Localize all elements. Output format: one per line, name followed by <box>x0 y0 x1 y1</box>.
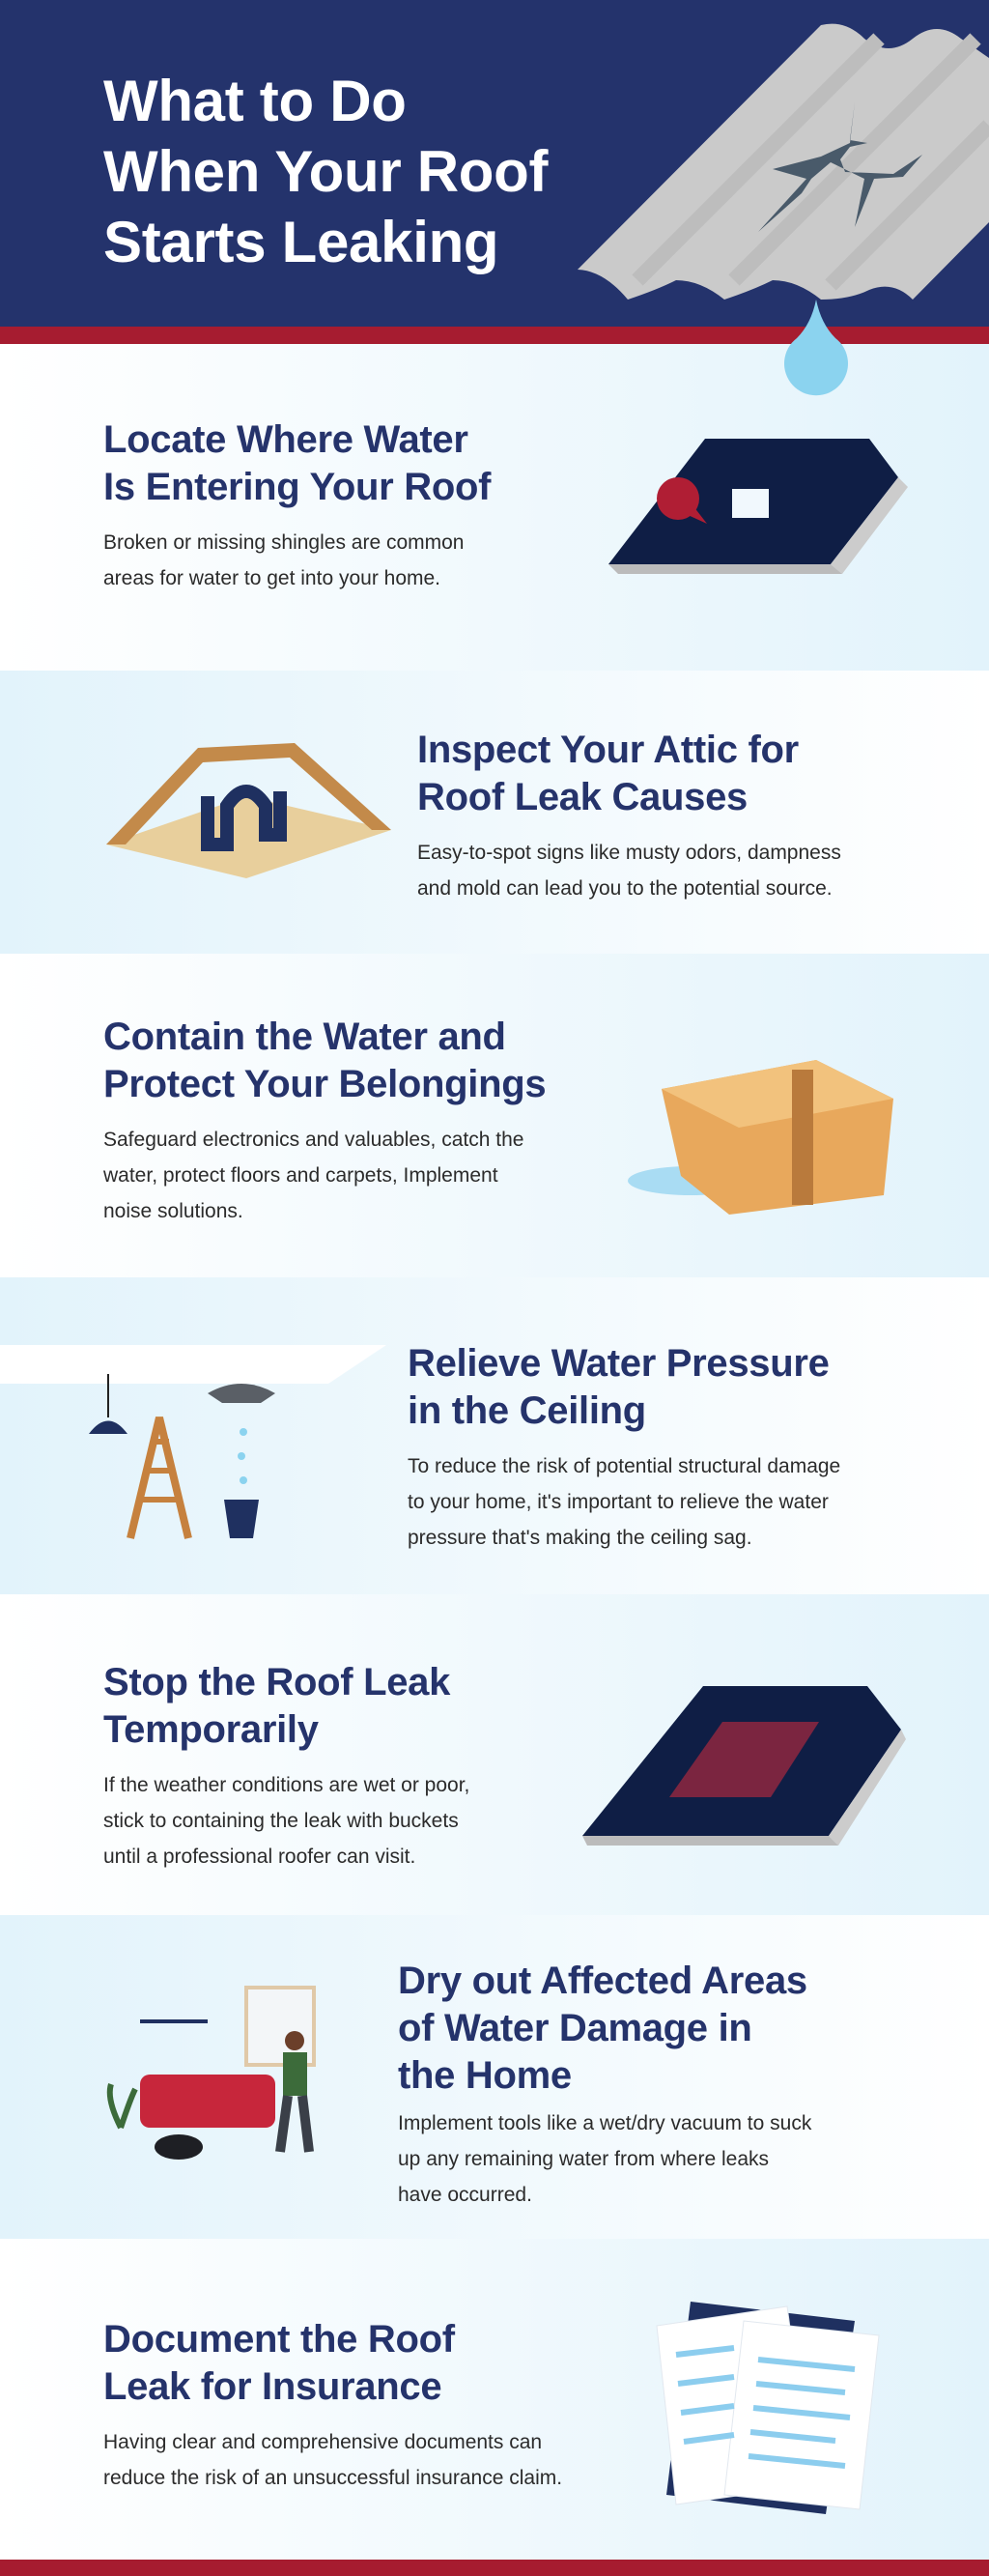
icon: ladder and bucket <box>0 1345 386 1539</box>
section 1: Locate Where Water <box>103 418 468 461</box>
icon: documents <box>657 2302 879 2514</box>
icon: corrugated roof sheet with crack and drop <box>578 23 989 396</box>
section 7: reduce the risk of an unsuccessful insurance claim. <box>103 2467 562 2489</box>
section 6: Implement tools like a wet/dry vacuum to suck <box>398 2112 811 2134</box>
bottom stripe <box>0 2560 989 2576</box>
icon: vacuuming person <box>106 1986 316 2160</box>
section 5: If the weather conditions are wet or poor, <box>103 1774 469 1796</box>
section 4: pressure that's making the ceiling sag. <box>408 1527 752 1549</box>
title: When Your Roof <box>103 139 548 204</box>
section 7: Document the Roof <box>103 2318 455 2361</box>
section 1: Broken or missing shingles are common <box>103 531 464 554</box>
icon: wet boxes <box>628 1060 893 1215</box>
section 3 <box>0 954 989 1277</box>
title: Starts Leaking <box>103 210 498 274</box>
section 5: Temporarily <box>103 1708 319 1751</box>
section 4: to your home, it's important to relieve the water <box>408 1491 829 1513</box>
section 1 <box>0 344 989 671</box>
section 2: Inspect Your Attic for <box>417 729 799 771</box>
header <box>0 0 989 327</box>
title: What to Do <box>103 69 407 133</box>
section 4: To reduce the risk of potential structural damage <box>408 1455 840 1477</box>
section 4: Relieve Water Pressure <box>408 1342 830 1385</box>
section 3: Contain the Water and <box>103 1016 506 1058</box>
section 5: Stop the Roof Leak <box>103 1661 450 1703</box>
section 1: areas for water to get into your home. <box>103 567 440 589</box>
section 3: noise solutions. <box>103 1200 243 1222</box>
section 6: the Home <box>398 2054 572 2097</box>
section 2: and mold can lead you to the potential source. <box>417 877 833 900</box>
section 5: stick to containing the leak with buckets <box>103 1810 459 1832</box>
section 3: Protect Your Belongings <box>103 1063 546 1105</box>
section 2 <box>0 671 989 954</box>
icon: roof patch <box>582 1686 906 1846</box>
section 5 <box>0 1594 989 1915</box>
section 7 <box>0 2239 989 2560</box>
section 6: have occurred. <box>398 2184 532 2206</box>
section 6: Dry out Affected Areas <box>398 1960 807 2002</box>
section 2: Easy-to-spot signs like musty odors, dampness <box>417 842 841 864</box>
section 2: Roof Leak Causes <box>417 776 748 818</box>
section 7: Leak for Insurance <box>103 2365 441 2408</box>
red stripe <box>0 327 989 344</box>
icon: attic <box>106 743 391 878</box>
title <box>103 69 549 274</box>
section 6: of Water Damage in <box>398 2007 752 2049</box>
icon: roof with hole <box>608 439 908 574</box>
section 7: Having clear and comprehensive documents can <box>103 2431 542 2453</box>
section 4 <box>0 1277 989 1594</box>
section 5: until a professional roofer can visit. <box>103 1846 415 1868</box>
section 1: Is Entering Your Roof <box>103 466 491 508</box>
section 3: water, protect floors and carpets, Implement <box>103 1164 498 1187</box>
section 6 <box>0 1915 989 2239</box>
section 6: up any remaining water from where leaks <box>398 2148 769 2170</box>
section 3: Safeguard electronics and valuables, catch the <box>103 1129 523 1151</box>
section 4: in the Ceiling <box>408 1389 646 1432</box>
